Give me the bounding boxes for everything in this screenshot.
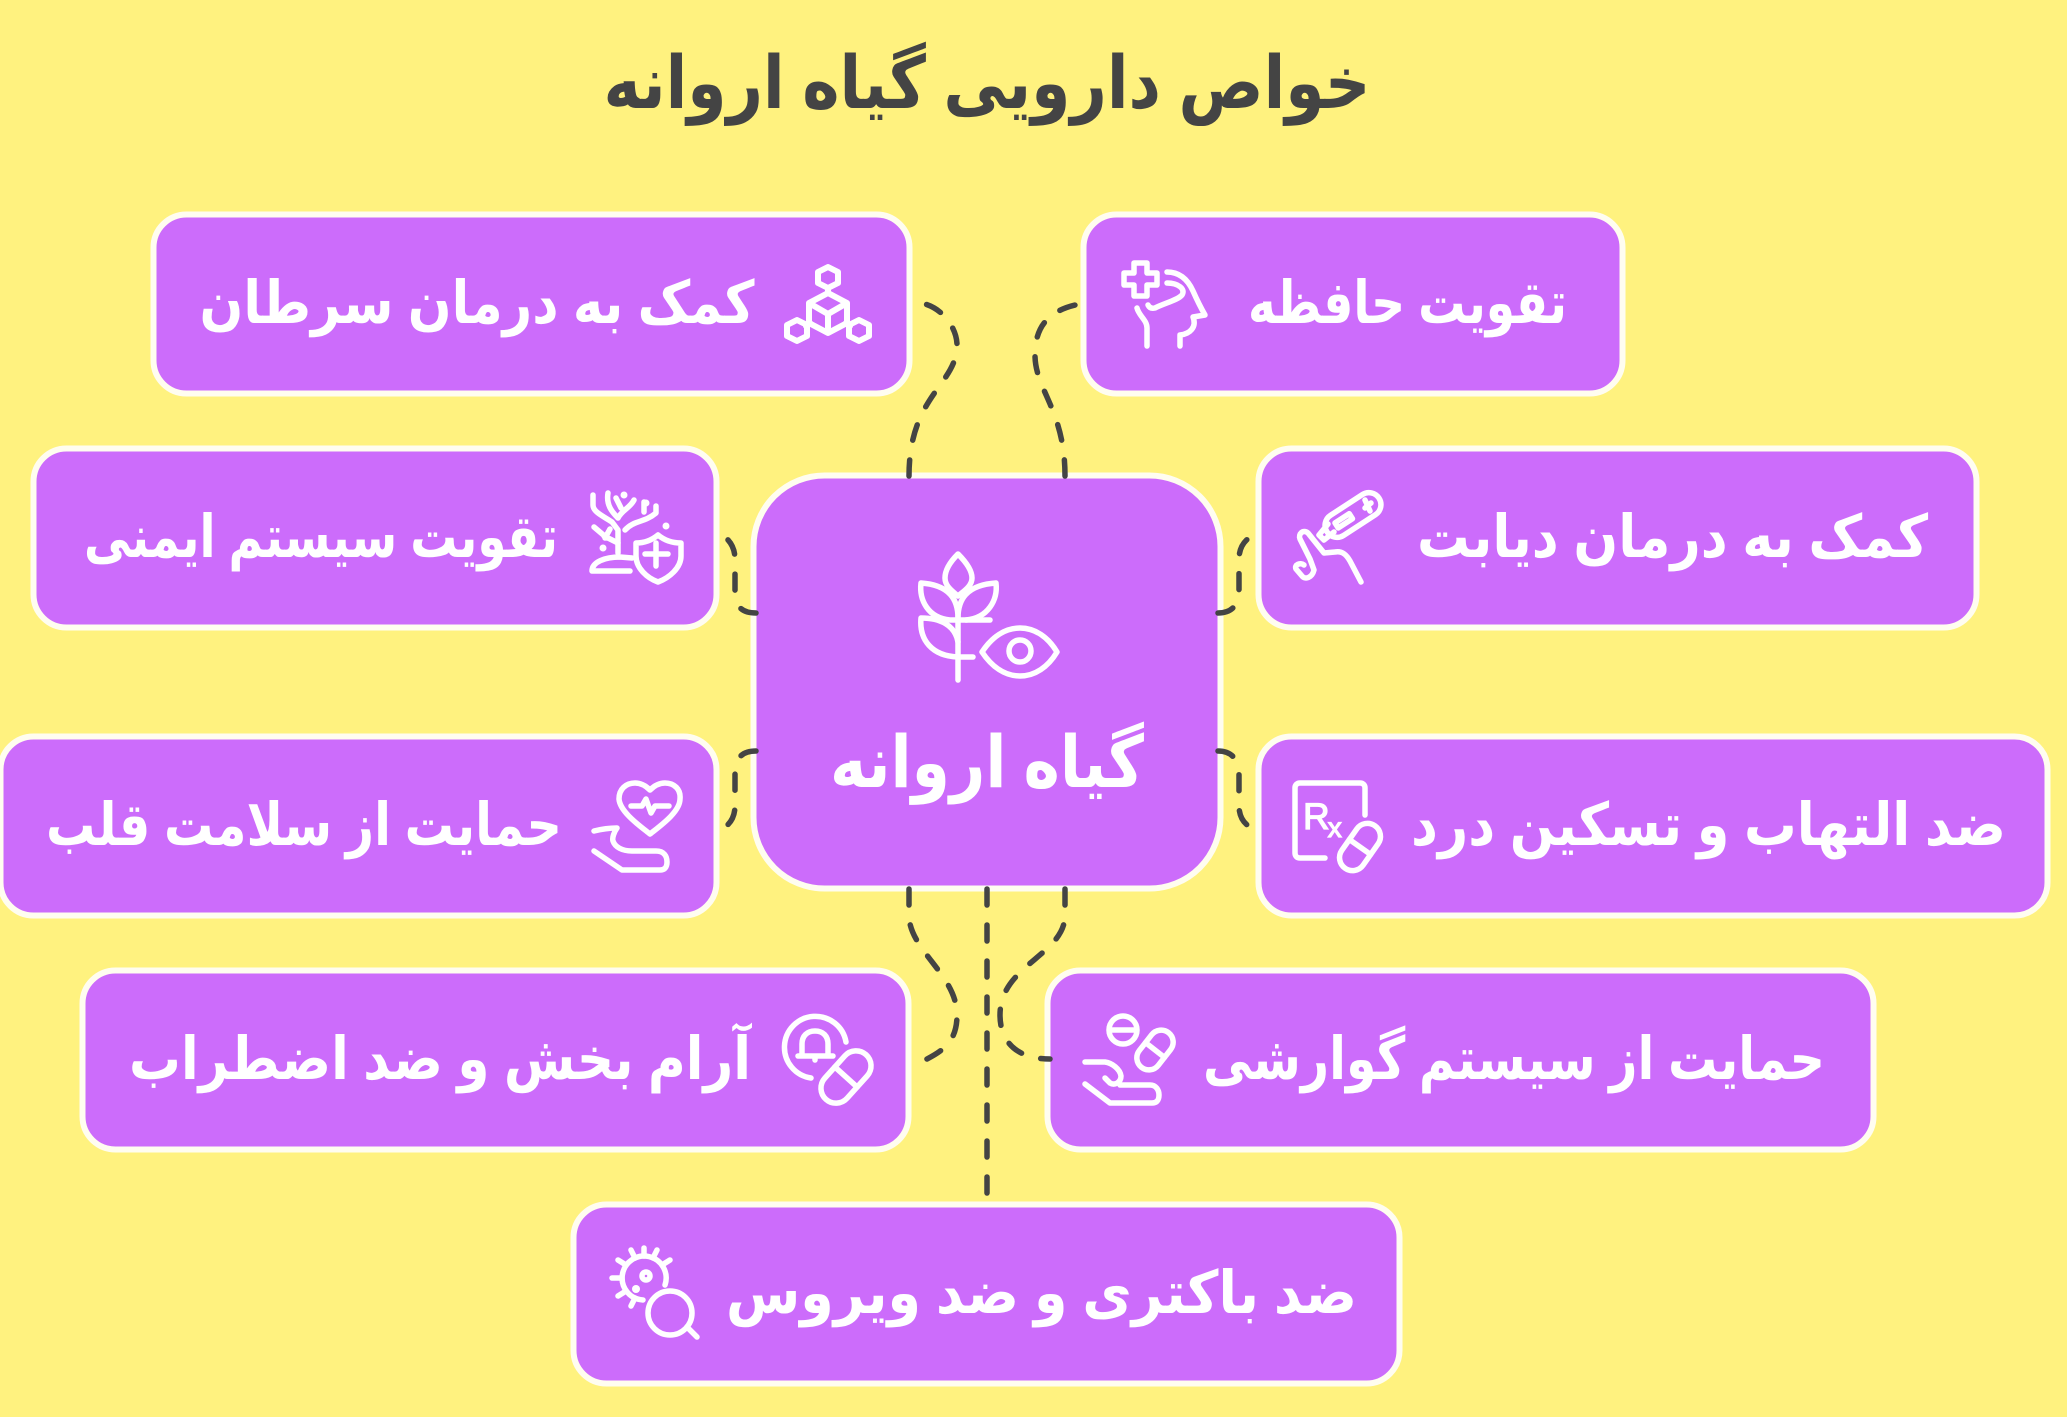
connector: hub to calming card [909, 889, 957, 1060]
panel [1258, 448, 1976, 628]
card: digestive system [1048, 970, 1874, 1150]
label: ضد التهاب و تسکین درد [1411, 792, 2006, 860]
connector: hub to antibacterial card [984, 889, 990, 1194]
icon dots [600, 492, 670, 552]
connector: hub to inflammation card [1218, 751, 1250, 827]
card: antibacterial and antiviral [574, 1204, 1400, 1384]
hub label: گیاه اروانه [830, 721, 1144, 805]
connector: hub to diabetes card [1218, 537, 1250, 613]
label: کمک به درمان دیابت [1417, 504, 1929, 571]
card: cancer treatment support [154, 214, 910, 394]
icon: glucose test strip and hand [1296, 488, 1386, 582]
label: تقویت سیستم ایمنی [84, 504, 558, 572]
panel [1048, 970, 1874, 1150]
card: memory boost [1084, 214, 1622, 394]
central hub [754, 476, 1220, 888]
connector: hub to cancer card [909, 304, 957, 476]
icon Rx mark: x [1328, 812, 1342, 843]
connector: hub to digestive card [1000, 889, 1065, 1059]
label: ضد باکتری و ضد ویروس [726, 1260, 1357, 1328]
card: diabetes treatment [1258, 448, 1976, 628]
card: calming and anti-anxiety [82, 970, 908, 1150]
card: immune system [34, 448, 716, 628]
card: heart health [0, 736, 716, 916]
icon: bell and capsule [784, 1016, 877, 1109]
panel [754, 476, 1220, 888]
icon: hand holding heart [594, 783, 680, 870]
label: آرام بخش و ضد اضطراب [129, 1022, 753, 1094]
icon: molecule cube [787, 267, 869, 341]
panel [574, 1204, 1400, 1384]
icon capsule [1334, 818, 1386, 876]
icon: plant and eye [921, 554, 1057, 680]
icon dot [632, 1285, 640, 1293]
icon: head with medical cross [1124, 263, 1205, 346]
label: حمایت از سیستم گوارشی [1203, 1025, 1825, 1094]
icon: bacteria and magnifier [612, 1248, 697, 1337]
title: خواص دارویی گیاه اروانه [604, 41, 1370, 126]
icon: hand with pills [1085, 1016, 1178, 1103]
panel [0, 736, 716, 916]
label: تقویت حافظه [1248, 270, 1567, 338]
panel [1084, 214, 1622, 394]
connector: hub to heart card [725, 751, 756, 827]
panel [82, 970, 908, 1150]
panel [154, 214, 910, 394]
icon Rx mark: R [1303, 796, 1330, 837]
label: حمایت از سلامت قلب [46, 792, 562, 859]
icon: tree and shield [592, 493, 681, 582]
connector: hub to immune card [725, 537, 756, 613]
connector: hub to memory card [1035, 303, 1086, 476]
label: کمک به درمان سرطان [200, 270, 755, 338]
icon: prescription and capsule [1295, 783, 1386, 876]
icon frame [1295, 783, 1365, 858]
panel [1258, 736, 2048, 916]
panel [34, 448, 716, 628]
card: anti-inflammation and pain relief [1258, 736, 2048, 916]
